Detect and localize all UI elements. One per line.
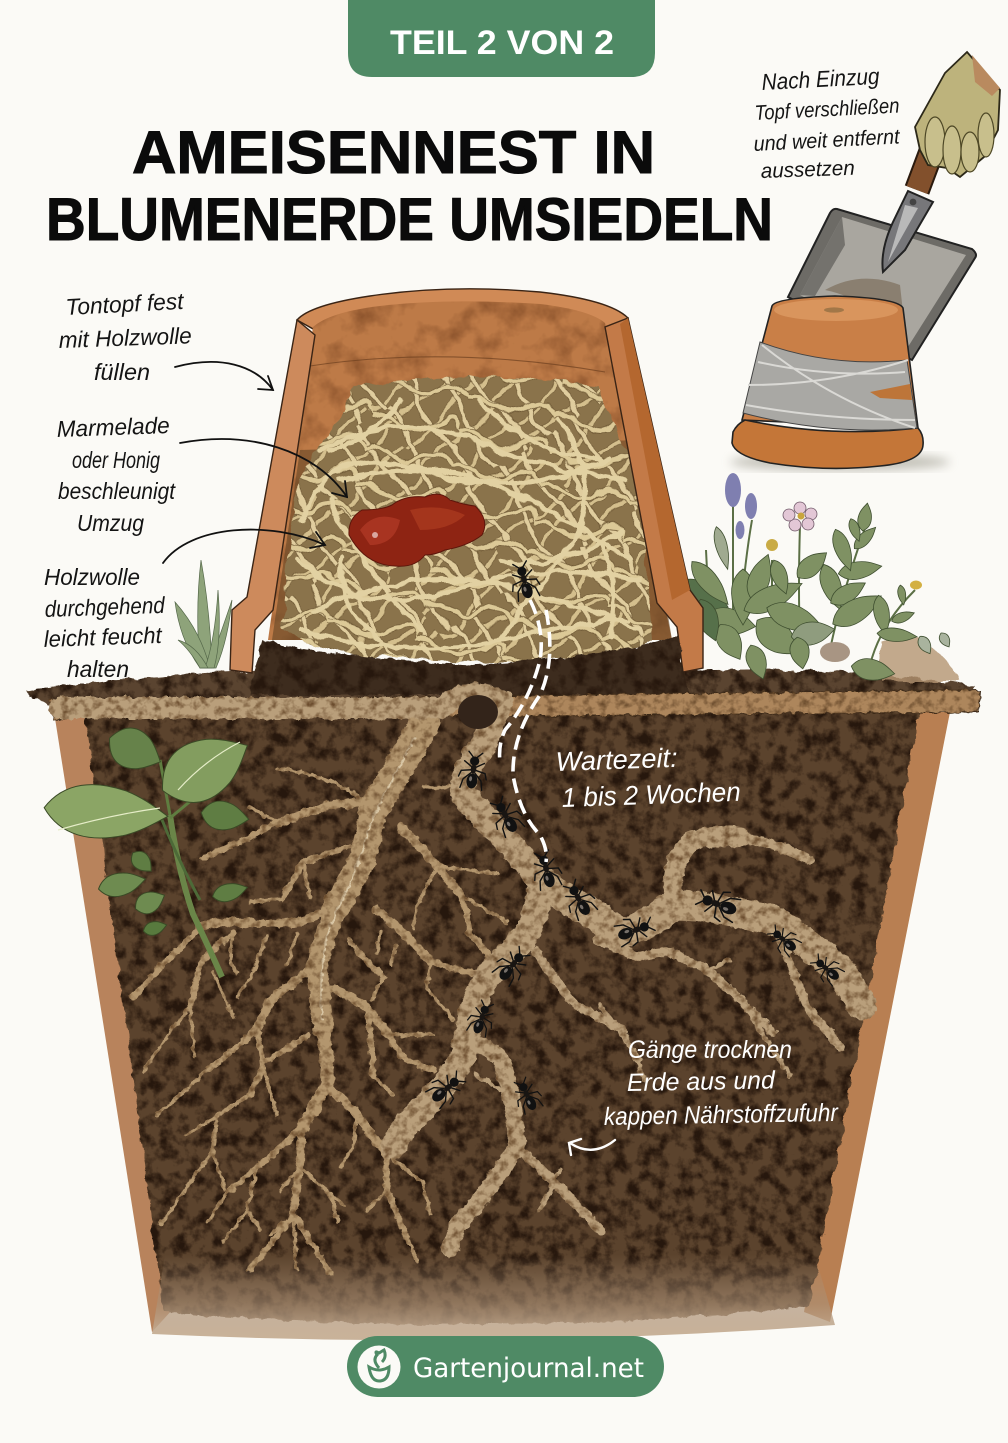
note: jam or honey: Marmelade (56, 412, 170, 442)
arrow: to wood wool (180, 439, 347, 497)
trowel blade (788, 209, 976, 360)
note: tunnels dry out soil: Erde aus und (627, 1066, 776, 1097)
main trunk (373, 722, 425, 811)
ant tunnels (60, 694, 862, 1250)
illustration: trowel and sealed pot (730, 52, 1000, 471)
dark hollow near tunnel entrance (458, 695, 498, 729)
header tab: Teil 2 von 2 (348, 0, 655, 77)
note: fill pot with wood wool: Tontopf fest (65, 288, 186, 320)
note: after moving in: aussetzen (760, 157, 855, 183)
note: keep wool moist: leicht feucht (43, 622, 164, 652)
pot rim outer (297, 289, 628, 330)
garden bed cross-section (50, 690, 980, 1340)
bed side right (804, 712, 950, 1322)
note: waiting time: 1 bis 2 Wochen (561, 777, 741, 813)
note: jam or honey: oder Honig (72, 447, 160, 473)
soil body (84, 708, 920, 1325)
jam (349, 494, 485, 566)
note: keep wool moist: Holzwolle (44, 564, 140, 590)
icon: sprout in pot (358, 1346, 400, 1388)
lower soil fringe (152, 1255, 835, 1340)
note: keep wool moist: halten (67, 656, 129, 682)
note: after moving in: Nach Einzug (761, 63, 880, 95)
pot right wall (605, 318, 703, 672)
wood wool filling (280, 376, 653, 663)
trowel handle (882, 150, 933, 272)
pot left wall (230, 320, 315, 673)
tape wrapped around pot (743, 342, 917, 430)
shadow under sealed pot (730, 453, 950, 471)
note: tunnels dry out soil: Gänge trocknen (628, 1036, 792, 1064)
footer badge: Gartenjournal.net: Gartenjournal.net (413, 1353, 644, 1384)
roots (133, 722, 507, 1273)
note: jam or honey: beschleunigt (58, 478, 176, 504)
soil patch right of plants (880, 634, 960, 682)
plant: left grass (175, 560, 232, 668)
note: keep wool moist: durchgehend (44, 592, 166, 622)
note: tunnels dry out soil (604, 1036, 840, 1131)
title (46, 119, 773, 253)
soil under large pot (250, 635, 690, 695)
note: tunnels dry out soil: kappen Nährstoffzufuhr (604, 1099, 840, 1131)
note: waiting time: Wartezeit: (555, 743, 678, 777)
dark inner shadow behind wool (272, 440, 672, 640)
title: AMEISENNEST IN (132, 119, 655, 186)
pot back wall (268, 301, 672, 640)
dashed ant route (500, 600, 550, 862)
note: after moving in: Topf verschließen (754, 94, 900, 125)
big leaves (42, 719, 261, 938)
sealed pot (732, 296, 923, 468)
note: jam or honey: Umzug (77, 510, 144, 536)
footer badge: Gartenjournal.net (347, 1336, 664, 1397)
ants (424, 559, 846, 1115)
arrow: to pot wall (175, 362, 273, 390)
arrow: to tunnel (569, 1139, 615, 1155)
left plant with big leaves (42, 719, 261, 977)
plants: right group (667, 473, 953, 684)
bed rim (50, 690, 980, 720)
header tab: Teil 2 von 2: TEIL 2 VON 2 (390, 24, 614, 62)
note: keep wool moist (43, 564, 166, 682)
bed side left (54, 712, 172, 1332)
arrow: to jam (163, 530, 325, 563)
note: after moving in: und weit entfernt (753, 125, 901, 156)
ground layer (25, 669, 975, 706)
large pot cross-section (230, 289, 703, 673)
note: jam or honey (56, 412, 176, 536)
note: fill pot with wood wool: mit Holzwolle (58, 322, 192, 353)
note: waiting time (555, 743, 741, 813)
note: fill pot with wood wool (58, 288, 192, 385)
glove (915, 52, 1000, 177)
title: BLUMENERDE UMSIEDELN (46, 186, 773, 253)
note: fill pot with wood wool: füllen (94, 359, 150, 385)
note: after moving in (753, 63, 901, 183)
